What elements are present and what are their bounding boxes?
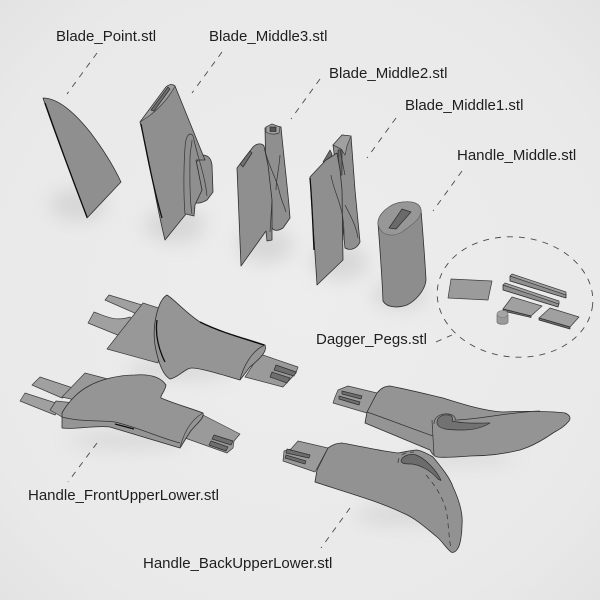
part: Handle back lower <box>283 441 462 552</box>
callout: Dagger_Pegs group <box>431 229 599 365</box>
part: Handle front lower <box>20 373 240 453</box>
peg: large plate <box>448 279 492 300</box>
peg: round pin <box>497 310 508 324</box>
part: Handle front upper <box>88 295 298 387</box>
label: Handle_BackUpperLower: Handle_BackUpperLower.stl <box>143 555 332 572</box>
part: Handle_Middle <box>378 202 426 307</box>
label: Handle_FrontUpperLower: Handle_FrontUpperLower.stl <box>28 487 219 504</box>
leader lines <box>67 52 462 548</box>
part: Blade_Middle2 <box>237 124 290 266</box>
part: Blade_Middle3 <box>140 85 213 240</box>
ground shadows <box>50 189 515 524</box>
label: Dagger_Pegs: Dagger_Pegs.stl <box>316 331 427 348</box>
label: Blade_Point: Blade_Point.stl <box>56 28 156 45</box>
part: Blade_Middle1 <box>310 135 360 285</box>
label: Blade_Middle3: Blade_Middle3.stl <box>209 28 327 45</box>
peg: long bars <box>503 274 566 307</box>
label: Handle_Middle: Handle_Middle.stl <box>457 147 576 164</box>
part: Blade_Point <box>43 98 121 218</box>
part: Handle back upper <box>333 386 570 457</box>
label: Blade_Middle2: Blade_Middle2.stl <box>329 65 447 82</box>
peg: small plates <box>503 297 579 329</box>
label: Blade_Middle1: Blade_Middle1.stl <box>405 97 523 114</box>
